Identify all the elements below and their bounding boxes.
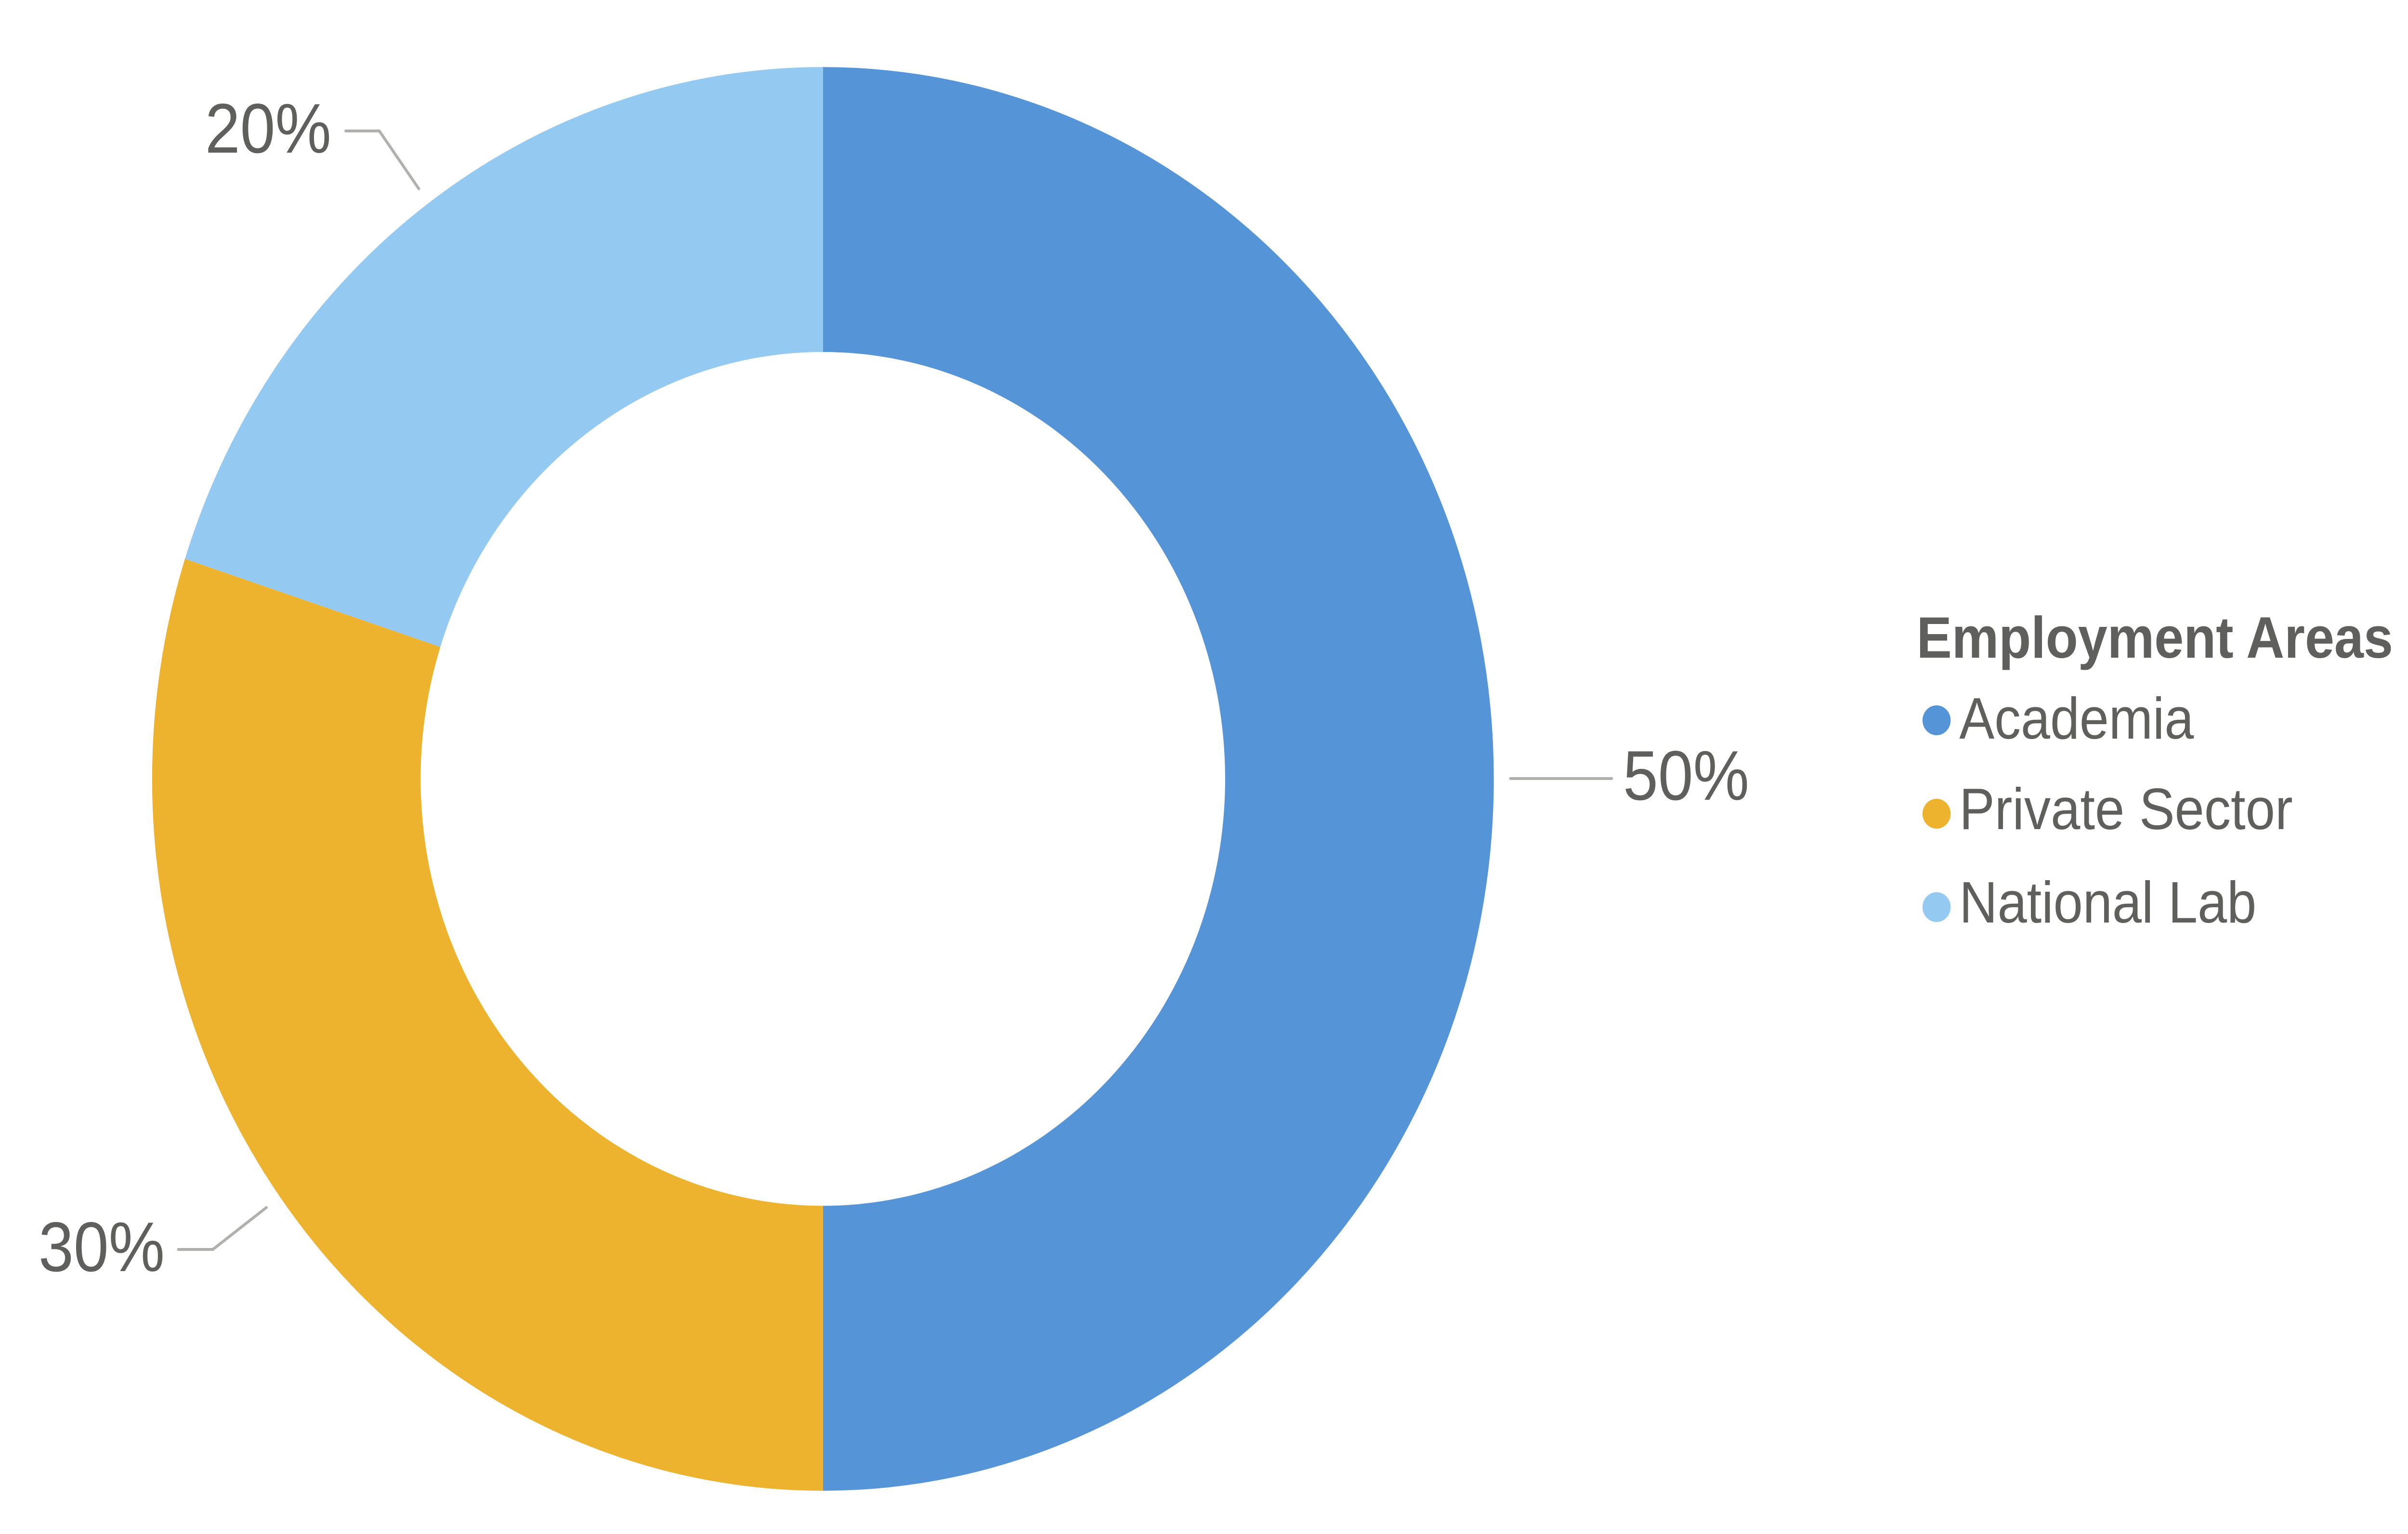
swatch: Private Sector (1923, 799, 1950, 829)
label: National Lab: National Lab (1959, 870, 2256, 936)
value label: 30%: 30% (39, 1208, 165, 1287)
legend item: Academia (1923, 686, 2194, 752)
callout: 30% (39, 1208, 266, 1287)
legend item: Private Sector (1923, 777, 2293, 842)
label: Private Sector: Private Sector (1959, 777, 2293, 842)
segment: Private Sector 30% (152, 559, 823, 1491)
leader line: 30% (178, 1208, 266, 1249)
legend title: Employment Areas (1917, 605, 2393, 671)
value label: 20%: 20% (205, 90, 331, 168)
segment: Academia 50% (823, 67, 1494, 1491)
label: Academia: Academia (1959, 686, 2194, 752)
donut chart (152, 67, 1494, 1491)
leader line: 50% (1510, 777, 1612, 780)
swatch: Academia (1923, 705, 1950, 735)
callout: 20% (205, 90, 419, 189)
segment: National Lab 20% (185, 67, 823, 647)
legend item: National Lab (1923, 870, 2256, 936)
swatch: National Lab (1923, 892, 1950, 922)
legend (1917, 605, 2393, 936)
value label: 50%: 50% (1623, 737, 1749, 815)
leader line: 20% (346, 131, 419, 189)
